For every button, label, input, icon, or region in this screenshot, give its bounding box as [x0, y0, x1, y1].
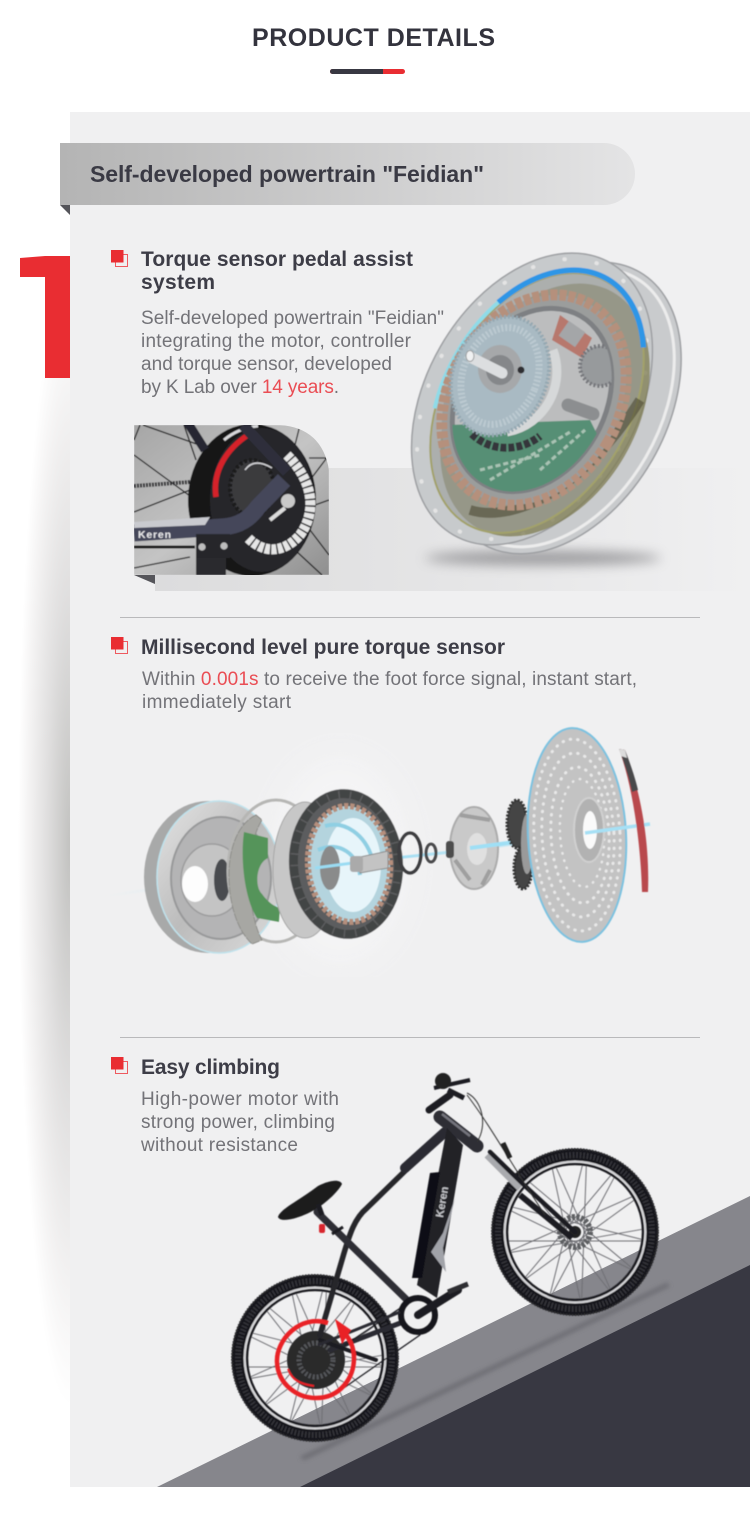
head tube and fork — [440, 1093, 575, 1238]
down tube with battery — [412, 1128, 463, 1298]
image: electric bike — [232, 1073, 658, 1441]
image: transparent hub motor — [410, 252, 682, 554]
hub centre — [478, 345, 522, 393]
cassette — [230, 460, 274, 516]
big numeral 1: 1 — [8, 220, 104, 414]
frame stays — [243, 425, 287, 472]
heading: millisecond sensor: Millisecond level pure torque sensor — [141, 636, 505, 659]
housing — [144, 801, 281, 953]
heading: torque sensor pedal assist: Torque sensor pedal assist — [141, 248, 413, 271]
bike shadow on slope — [300, 1283, 670, 1460]
big numeral 1 — [20, 256, 70, 378]
body text: and torque sensor, developed — [141, 354, 392, 375]
body text: Self-developed powertrain "Feidian" — [141, 308, 444, 329]
planet carrier — [446, 807, 515, 889]
body text: Within 0.001s to receive the foot force signal, instant start, — [142, 669, 637, 690]
left panel shadow — [18, 285, 122, 1405]
slope: dark band — [300, 1265, 750, 1487]
motor floor shadow — [425, 551, 661, 565]
body text: integrating the motor, controller — [141, 331, 412, 352]
hub body — [188, 424, 316, 576]
divider 1 — [120, 616, 700, 618]
body text: by K Lab over 14 years. — [141, 377, 339, 398]
stator wheel — [273, 786, 407, 942]
shaft — [350, 851, 388, 873]
title — [252, 24, 495, 74]
icon: bullet square — [111, 637, 128, 654]
mount plate — [196, 534, 230, 558]
banner: section heading: Self-developed powertrain "Feidian" — [90, 161, 484, 187]
crank and chainring — [318, 1284, 468, 1345]
dark components — [472, 434, 540, 448]
body text: without resistance — [140, 1135, 298, 1156]
photo spokes — [134, 425, 329, 575]
banner: section heading — [60, 143, 635, 215]
keren logo: Keren — [138, 529, 171, 541]
inner stator ring — [420, 279, 644, 521]
grey strip behind images — [134, 468, 750, 591]
silver hub ring — [507, 350, 557, 432]
saddle — [278, 1181, 343, 1234]
top right components — [552, 315, 592, 358]
chain — [134, 482, 190, 486]
front disc — [362, 210, 702, 588]
PCB — [452, 420, 597, 492]
copper windings — [405, 261, 663, 539]
pin cylinder — [568, 405, 593, 414]
icon: bullet square — [111, 1057, 128, 1074]
rear wheel — [232, 1275, 398, 1441]
axle — [472, 358, 502, 373]
glow behind parts — [270, 755, 410, 965]
olive rim — [397, 246, 693, 574]
body text: strong power, climbing — [141, 1112, 335, 1133]
red hub strip — [619, 749, 648, 892]
body text — [142, 669, 637, 713]
body text: immediately start — [142, 692, 292, 713]
blue glow arc — [386, 232, 688, 568]
handlebar — [429, 1073, 510, 1158]
heading: easy climbing: Easy climbing — [141, 1056, 280, 1079]
flange bolt holes — [370, 218, 694, 580]
section 2 text — [111, 636, 637, 713]
section 1 text — [111, 248, 444, 398]
heading line 2: system — [141, 271, 215, 294]
red arc — [215, 435, 248, 497]
toothed planet gear disc — [434, 302, 566, 450]
back disc — [392, 220, 730, 596]
icon: bullet square — [111, 250, 128, 266]
magnet ring with green board — [228, 800, 324, 944]
body text — [140, 1089, 339, 1156]
perforated end plate — [522, 726, 650, 944]
body text — [141, 308, 444, 398]
retaining rings — [399, 833, 436, 873]
slope: light grey band — [157, 1196, 750, 1487]
section 3 text — [111, 1056, 339, 1156]
body text: High-power motor with — [141, 1089, 339, 1110]
red rotation arrow — [277, 1319, 354, 1398]
planet gears — [507, 800, 533, 889]
title: PRODUCT DETAILS — [252, 24, 495, 52]
side gear — [580, 346, 620, 386]
brake disc — [248, 455, 310, 549]
divider 2 — [120, 1036, 700, 1038]
rear hub motor — [287, 1331, 345, 1389]
front wheel — [492, 1149, 658, 1315]
axle beam — [105, 824, 660, 896]
down tube with battery: Keren — [434, 1185, 451, 1219]
image: exploded motor — [105, 726, 660, 965]
image: rear hub photo — [134, 420, 329, 576]
frame tubes — [317, 1132, 445, 1392]
